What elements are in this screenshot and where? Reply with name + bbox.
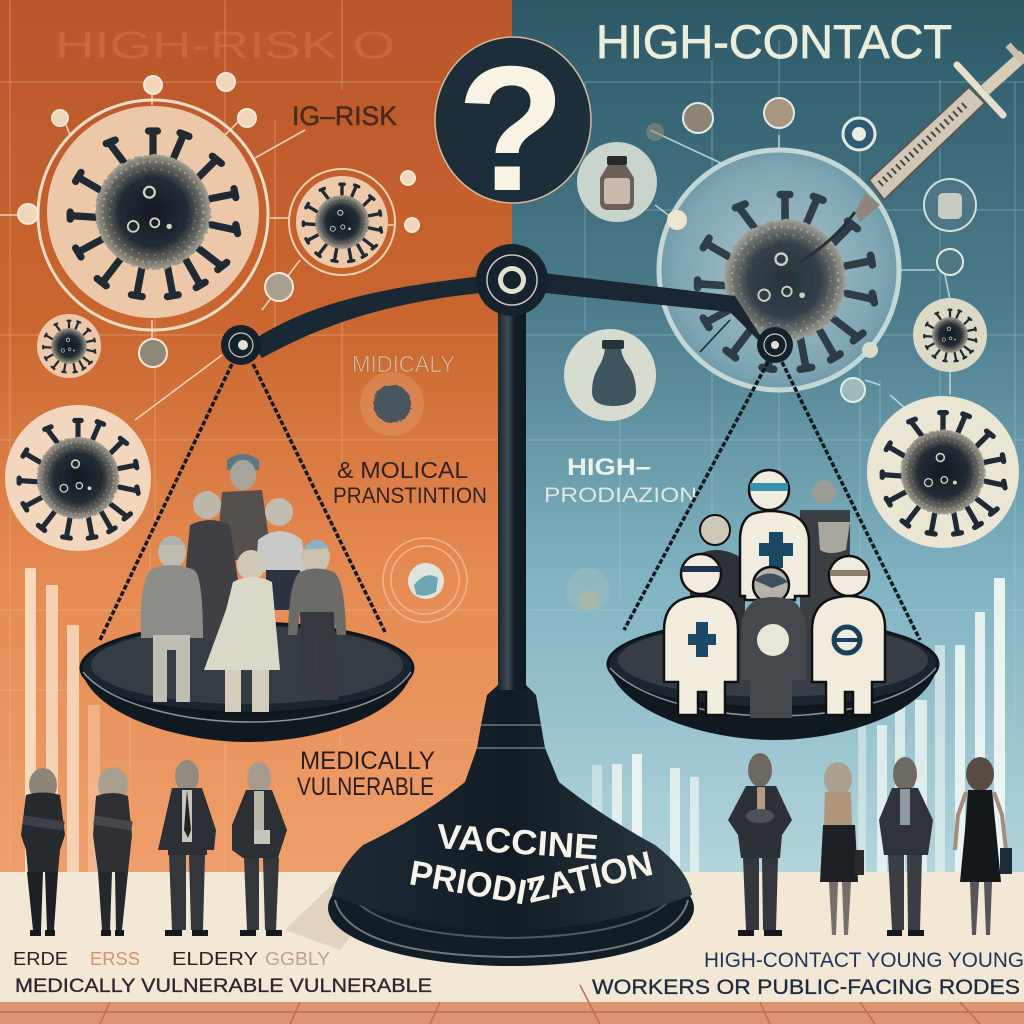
- icon: faint medical virus: [360, 372, 424, 436]
- floor figures: elderly group: [21, 760, 287, 936]
- connector lines left: [0, 85, 395, 420]
- front centre seated woman: [204, 550, 280, 712]
- question mark badge: [435, 29, 591, 228]
- label: elderly: ELDERY: [172, 949, 258, 969]
- man three: [158, 760, 216, 936]
- label: medically vulnerable: VULNERABLE: [297, 773, 434, 801]
- icon: virus disc right lower: [867, 396, 1019, 548]
- woman one: [21, 768, 65, 936]
- icon: virus large top left: [38, 100, 268, 330]
- label: high-contact young: HIGH-CONTACT YOUNG YOUNG: [704, 949, 1024, 972]
- floor figures: young workers: [728, 753, 1012, 936]
- label: medically faint: MIDICALY: [352, 351, 455, 377]
- label: elderly: ERSS: [90, 949, 140, 969]
- label: medically vulnerable: [297, 747, 435, 801]
- label: elderly: [13, 949, 330, 969]
- pivot: [476, 244, 548, 316]
- label: medical transition: & MOLICAL: [337, 457, 468, 483]
- floor: [0, 872, 1024, 1002]
- people: high-contact workers on pan: [664, 470, 885, 718]
- woman two: [93, 767, 132, 936]
- label: vaccine prioritization: PRIODI': [407, 853, 537, 914]
- left pan: [81, 623, 413, 742]
- woman six: [820, 762, 864, 935]
- front centre worker: [741, 567, 806, 718]
- label: workers public-facing: WORKERS OR PUBLIC-FACING RODES: [592, 976, 1020, 999]
- woman eight: [955, 757, 1012, 935]
- panel: right grid: [515, 40, 1024, 870]
- icon: node dots right: [646, 98, 976, 402]
- label: high prioritization: [544, 454, 697, 507]
- label: elderly: ERDE: [13, 949, 68, 969]
- icon: virus medium: [289, 169, 395, 275]
- floor shadow of the base: [285, 872, 400, 950]
- icon: vial top: [577, 142, 657, 222]
- back centre medic: [740, 470, 809, 600]
- post: [498, 300, 526, 690]
- icon: central virus disc right: [659, 150, 899, 390]
- right pan: [608, 620, 938, 740]
- icon: faint medical transition badge: [383, 538, 467, 622]
- back right woman: [256, 498, 306, 610]
- front right medic: [812, 556, 885, 715]
- base plinth: [328, 850, 694, 966]
- label: vaccine prioritization: ZATION: [523, 844, 657, 911]
- front left man: [141, 536, 203, 702]
- panel: high-risk orange background: [0, 0, 512, 880]
- scale beam: [250, 272, 785, 358]
- label: vaccine prioritization: VACCINE: [435, 817, 600, 867]
- icon: faint bubble right: [566, 568, 610, 612]
- label: medical transition: [333, 457, 487, 508]
- back left woman: [184, 491, 238, 640]
- left beam node: [221, 325, 261, 365]
- label: vaccine prioritization: [407, 817, 657, 914]
- icon: virus disc right small: [913, 298, 987, 372]
- heading: high-contact: HIGH-CONTACT: [596, 15, 952, 68]
- icon: virus small left: [37, 314, 101, 378]
- icon: virus lower left: [5, 405, 151, 551]
- people: high-risk elderly group on pan: [141, 454, 346, 712]
- faint high-risk heading: HIGH-RISK O: [55, 25, 395, 67]
- scale stand: [328, 300, 694, 966]
- icon: vial lower: [564, 329, 656, 421]
- floor tiles: [0, 985, 1024, 1024]
- bar chart: right: [592, 578, 1005, 872]
- right beam node: [757, 327, 793, 363]
- front right man: [288, 539, 346, 700]
- back right worker: [800, 480, 850, 640]
- label: medically vulnerable: MEDICALLY: [300, 747, 435, 775]
- label: high prioritization: HIGH–: [567, 454, 651, 481]
- question mark badge: ?: [457, 29, 565, 228]
- label: high prioritization: PRODIAZION: [544, 484, 697, 507]
- man four: [232, 762, 287, 936]
- label: medically vulnerable footer: MEDICALLY VULNERABLE VULNERABLE: [15, 976, 432, 997]
- panel: left grid: [0, 0, 500, 870]
- man seven: [879, 757, 933, 936]
- back man: [216, 454, 272, 560]
- icon: syringe: [800, 45, 1024, 262]
- connector lines right: [650, 130, 950, 425]
- front left medic: [664, 554, 738, 715]
- bar chart: left: [25, 568, 100, 872]
- man five: [728, 753, 792, 936]
- icon: small connector nodes left: [18, 73, 419, 367]
- back left worker: [690, 515, 745, 640]
- label: elderly: GGBLY: [265, 949, 330, 969]
- panel: high-contact teal background: [512, 0, 1024, 880]
- chains: [100, 362, 920, 640]
- bell: [332, 300, 692, 930]
- label: risk: IG–RISK: [292, 101, 397, 131]
- label: medical transition: PRANSTINTION: [333, 483, 487, 508]
